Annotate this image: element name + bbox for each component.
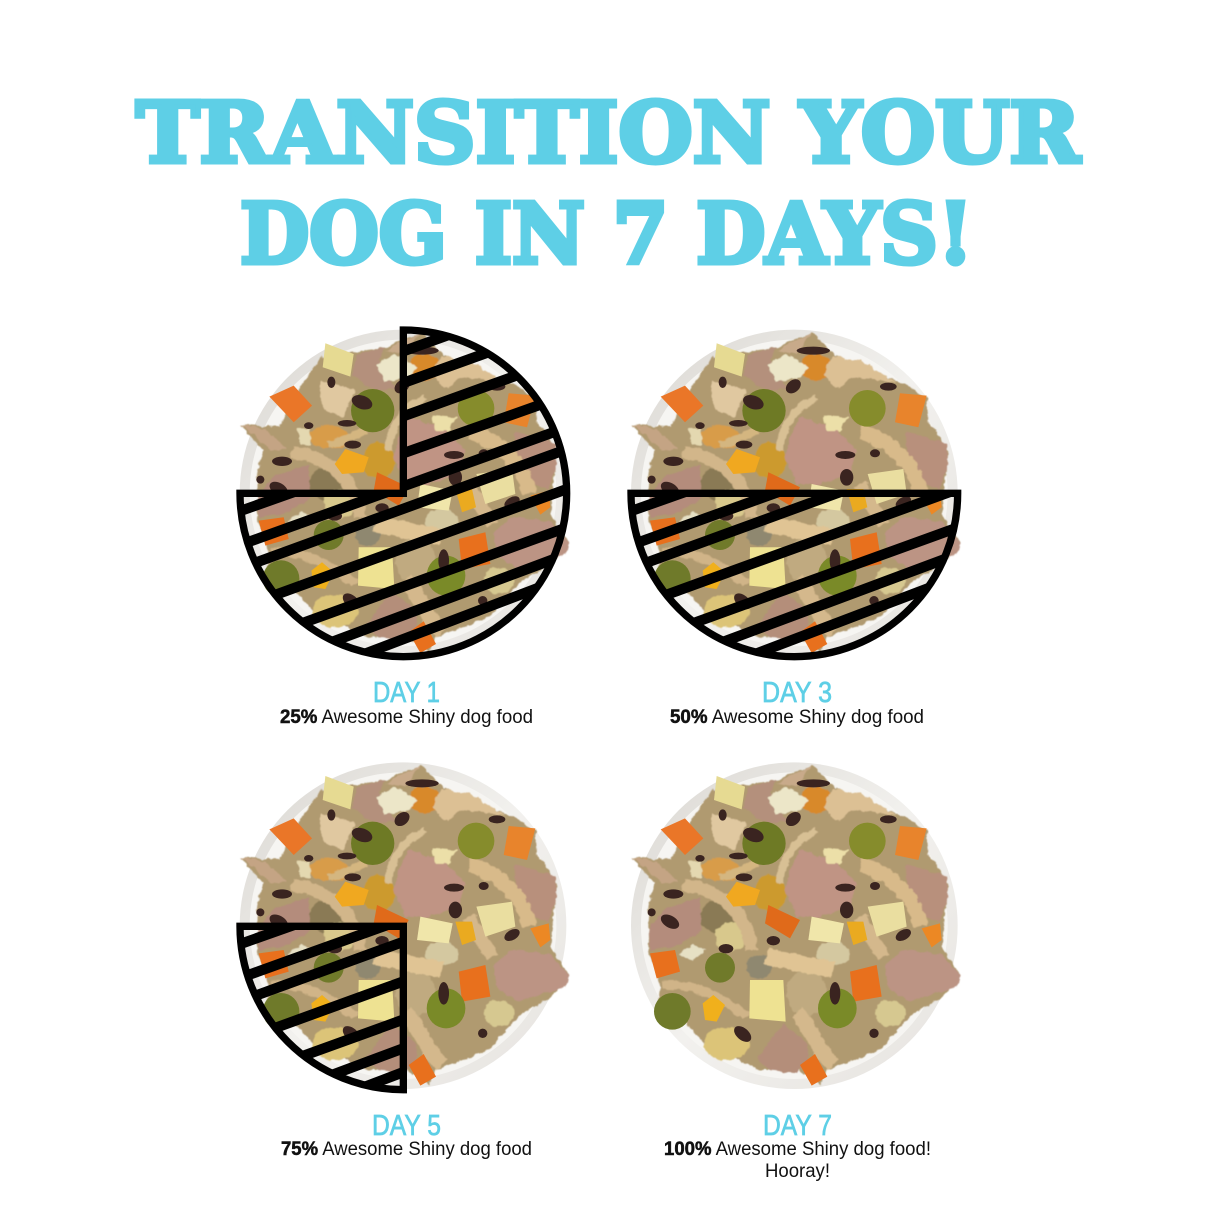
day 3 heading: DAY 3 xyxy=(762,677,832,709)
title xyxy=(136,84,1081,283)
day 5 heading: DAY 5 xyxy=(372,1110,441,1142)
bowl photo day 7 xyxy=(631,762,961,1089)
hatched pie 25 percent xyxy=(236,922,407,1094)
day 1 description: 25% Awesome Shiny dog food xyxy=(280,707,533,728)
panel: day 7 xyxy=(631,762,961,1182)
panel: day 5 xyxy=(236,762,570,1159)
title: DOG IN 7 DAYS! xyxy=(240,185,973,283)
day 7 heading: DAY 7 xyxy=(763,1110,832,1142)
day 3 description: 50% Awesome Shiny dog food xyxy=(670,707,924,728)
panel: day 1 xyxy=(236,326,570,727)
hatched pie 75 percent xyxy=(236,326,570,660)
day 1 heading: DAY 1 xyxy=(373,677,440,709)
day 7 description xyxy=(664,1139,931,1182)
bowl photo day 1 xyxy=(240,330,569,656)
panel: day 3 xyxy=(627,330,962,727)
hatched pie 50 percent xyxy=(627,490,962,660)
bowl photo day 3 xyxy=(631,330,961,656)
day 7 description: Hooray! xyxy=(765,1161,830,1182)
title: TRANSITION YOUR xyxy=(136,84,1081,182)
day 5 description: 75% Awesome Shiny dog food xyxy=(281,1139,532,1160)
bowl photo day 5 xyxy=(240,762,569,1089)
day 7 description: 100% Awesome Shiny dog food! xyxy=(664,1139,931,1160)
